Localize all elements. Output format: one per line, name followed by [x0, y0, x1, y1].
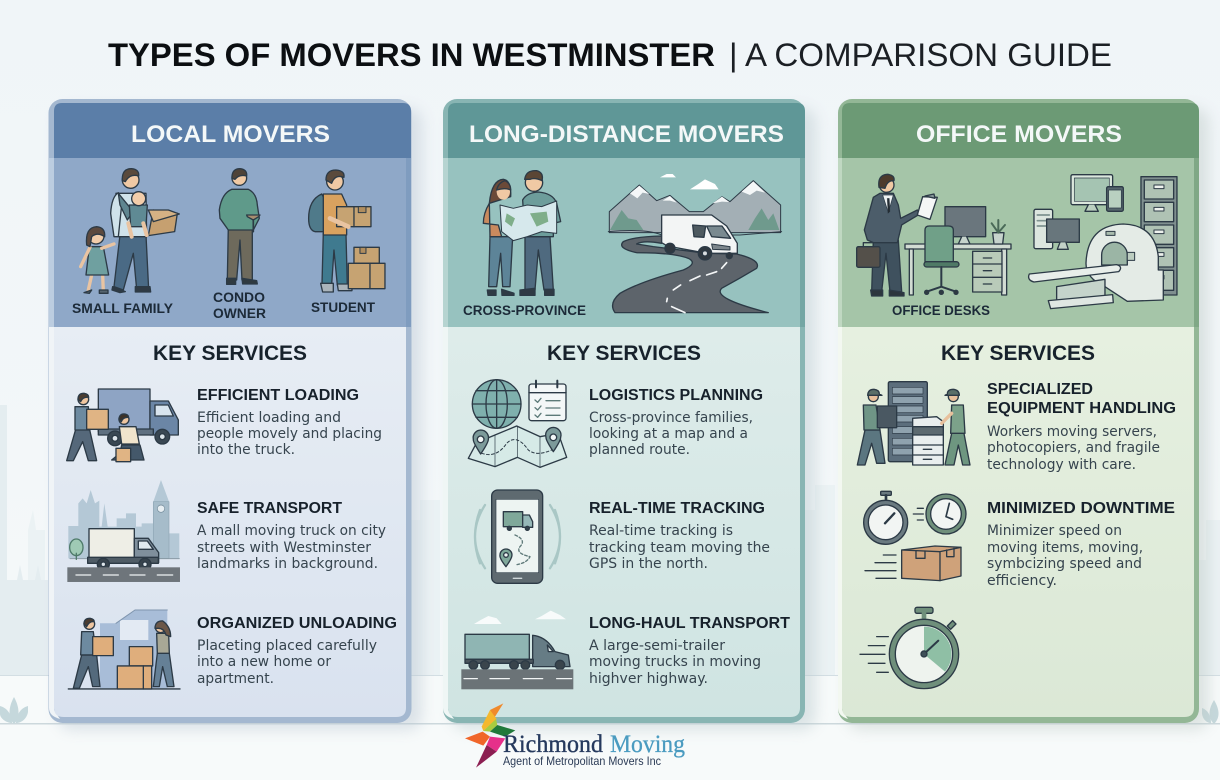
panel 2 frame: [443, 99, 816, 730]
description: [589, 638, 761, 687]
icon: stopwatch, clock and moving box: [864, 491, 966, 581]
service: minimized downtime: [864, 491, 1175, 589]
logo name: Moving: [610, 731, 685, 758]
icon: large stopwatch: [860, 607, 959, 689]
label: small family: SMALL FAMILY: [72, 301, 173, 316]
label: condo owner: [213, 290, 266, 321]
description: symbcizing speed and: [987, 556, 1142, 572]
service: organized unloading: [68, 610, 397, 689]
heading: [987, 381, 1176, 417]
icon: truck with Westminster skyline: [67, 480, 180, 582]
illustration: medical and office equipment: [1029, 175, 1177, 309]
description: Efficient loading and: [197, 410, 341, 426]
heading: SPECIALIZED: [987, 381, 1093, 398]
description: planned route.: [589, 442, 690, 458]
logo name: [503, 731, 685, 758]
panel 1 frame: [48, 99, 422, 730]
description: efficiency.: [987, 573, 1057, 589]
icon: workers moving server and copier: [857, 382, 970, 465]
description: Real-time tracking is: [589, 523, 733, 539]
description: moving items, moving,: [987, 540, 1143, 556]
service: efficient loading: [67, 387, 382, 462]
description: into the truck.: [197, 442, 295, 458]
logo: Richmond Moving: [465, 703, 685, 768]
description: [589, 410, 753, 458]
description: moving trucks in moving: [589, 654, 761, 670]
title: | A COMPARISON GUIDE: [729, 37, 1112, 73]
label: condo owner: CONDO: [213, 290, 265, 305]
description: [197, 410, 382, 458]
illustration: couple reading a map: [483, 171, 561, 295]
description: [589, 523, 770, 572]
service: long-haul transport: [461, 611, 790, 689]
service: logistics planning: [468, 380, 763, 467]
icon: unloading boxes at a home: [68, 610, 180, 689]
plant left: [0, 697, 28, 724]
heading: LOGISTICS PLANNING: [589, 387, 763, 404]
background skyline: [0, 405, 1220, 780]
panel 2 heading: LONG-DISTANCE MOVERS: [469, 121, 784, 148]
description: [197, 638, 377, 687]
heading: SAFE TRANSPORT: [197, 500, 342, 517]
description: highver highway.: [589, 671, 708, 687]
logo mark: [465, 703, 515, 768]
label: condo owner: OWNER: [213, 306, 266, 321]
description: Workers moving servers,: [987, 424, 1157, 440]
panel 3 heading: OFFICE MOVERS: [916, 121, 1122, 148]
description: apartment.: [197, 671, 274, 687]
description: streets with Westminster: [197, 540, 371, 556]
panel 3 frame: [838, 99, 1209, 730]
panel 1 heading: LOCAL MOVERS: [131, 121, 330, 148]
key services heading: KEY SERVICES: [941, 342, 1095, 365]
panel: local movers: [48, 99, 422, 730]
illustration: student: [309, 170, 385, 292]
icon: loading truck: [67, 389, 178, 462]
icon: semi-trailer on highway: [461, 611, 573, 689]
service: safe transport: [67, 480, 386, 582]
illustration: condo owner: [219, 169, 260, 284]
title: [108, 37, 1112, 73]
heading: ORGANIZED UNLOADING: [197, 615, 397, 632]
logo name: Richmond: [503, 731, 603, 758]
description: Placeting placed carefully: [197, 638, 377, 654]
service: specialized equipment handling: [857, 381, 1176, 473]
description: people movely and placing: [197, 426, 382, 442]
description: technology with care.: [987, 457, 1136, 473]
label: student: STUDENT: [311, 300, 376, 315]
description: [197, 523, 386, 572]
logo tagline: Agent of Metropolitan Movers Inc: [503, 754, 661, 768]
title: TYPES OF MOVERS IN WESTMINSTER: [108, 37, 715, 73]
label: cross-province: CROSS-PROVINCE: [463, 303, 586, 318]
description: photocopiers, and fragile: [987, 440, 1160, 456]
description: looking at a map and a: [589, 426, 748, 442]
description: into a new home or: [197, 654, 331, 670]
illustration: van on a mountain road: [608, 174, 782, 313]
description: Cross-province families,: [589, 410, 753, 426]
icon: globe, checklist and route map: [468, 380, 567, 467]
heading: EQUIPMENT HANDLING: [987, 400, 1176, 417]
illustration: businessman at office desk: [857, 174, 1011, 296]
key services heading: KEY SERVICES: [153, 342, 307, 365]
heading: REAL-TIME TRACKING: [589, 500, 765, 517]
plant right: [1202, 700, 1218, 724]
heading: EFFICIENT LOADING: [197, 387, 359, 404]
description: [987, 523, 1143, 589]
panel: office movers: [838, 99, 1209, 730]
description: landmarks in background.: [197, 556, 378, 572]
description: GPS in the north.: [589, 556, 708, 572]
description: tracking team moving the: [589, 540, 770, 556]
heading: LONG-HAUL TRANSPORT: [589, 615, 790, 632]
key services heading: KEY SERVICES: [547, 342, 701, 365]
icon: GPS tracking phone: [475, 490, 560, 583]
illustration: small family: [81, 169, 179, 293]
description: Minimizer speed on: [987, 523, 1122, 539]
description: [987, 424, 1160, 473]
heading: MINIMIZED DOWNTIME: [987, 500, 1175, 517]
description: A large-semi-trailer: [589, 638, 725, 654]
description: A mall moving truck on city: [197, 523, 386, 539]
panel: long-distance movers: [443, 99, 816, 730]
service: real-time tracking: [475, 490, 770, 583]
label: office desks: OFFICE DESKS: [892, 303, 990, 318]
